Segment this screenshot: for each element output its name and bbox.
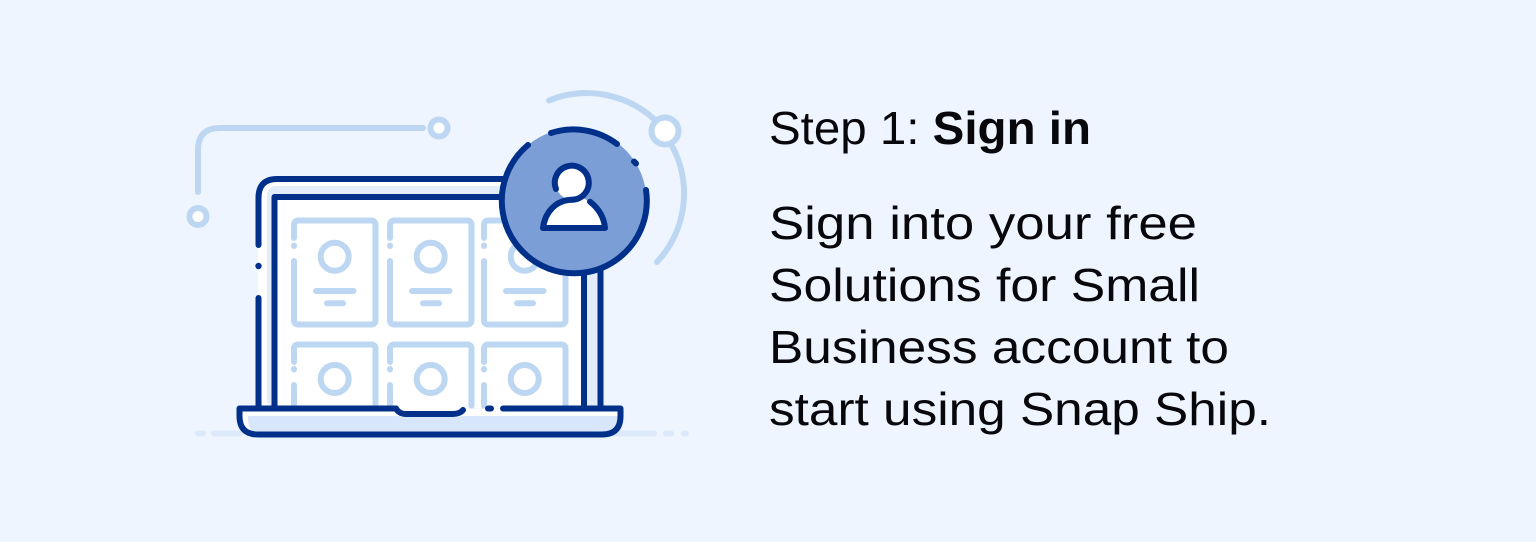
laptop base <box>240 406 620 434</box>
illustration: laptop with user sign-in badge <box>190 93 686 434</box>
card row 2 <box>294 344 566 406</box>
badge outline arcs <box>502 129 647 273</box>
user badge <box>502 128 647 274</box>
card row 1 <box>294 220 566 324</box>
ground dashes <box>198 430 686 436</box>
body text: Business account to <box>769 321 1229 373</box>
heading: Step 1: Sign in: Step 1: Sign in <box>769 102 1091 154</box>
user icon <box>543 166 605 228</box>
profile cards grid <box>294 220 566 406</box>
connector line with nodes, top left <box>190 120 448 225</box>
laptop lid and screen <box>255 179 601 408</box>
body text: Solutions for Small <box>769 259 1200 311</box>
orbit arc with node, top right <box>549 93 684 262</box>
body text: Sign into your free <box>769 197 1197 249</box>
body text: start using Snap Ship. <box>769 383 1271 435</box>
body text <box>769 197 1271 435</box>
